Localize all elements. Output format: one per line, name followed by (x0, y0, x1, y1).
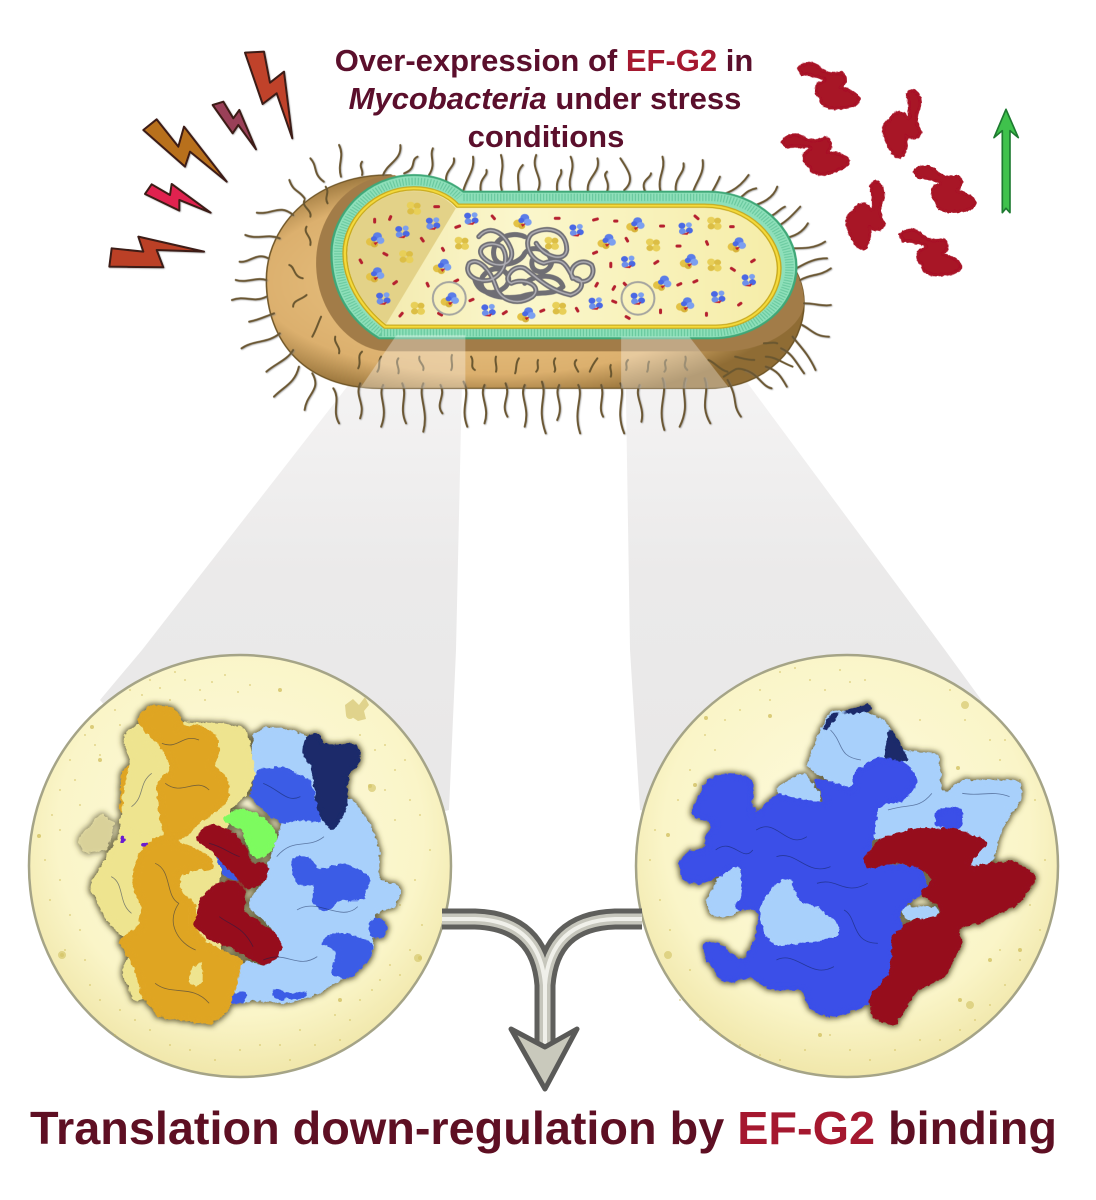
protein 4 (914, 167, 975, 212)
bacterium (232, 145, 831, 433)
highlight circle 2 (622, 282, 654, 315)
EF-G2 domains (192, 823, 283, 967)
surface contour lines (111, 738, 358, 1003)
green up arrow (994, 109, 1018, 213)
purple ligands (123, 839, 145, 845)
protein 5 (837, 180, 899, 252)
small gold lobe (120, 760, 138, 820)
beam overlay right (621, 337, 729, 388)
cut edge band (316, 175, 804, 351)
pale overlay upper (121, 728, 169, 837)
magnified disc: right (636, 655, 1058, 1077)
title: conditions (468, 119, 624, 154)
ribosomes in cytoplasm (366, 202, 756, 322)
ghost density (77, 813, 115, 853)
gold subunit (118, 705, 243, 1025)
protein 1 (798, 63, 859, 108)
EF-G2 protein cluster (781, 63, 975, 275)
inner surface hairs (289, 187, 793, 377)
title: Over-expression of EF-G2 in (335, 43, 753, 78)
arrow shaft (442, 919, 642, 1050)
shaded cut wedge (347, 191, 456, 324)
blue patches (211, 767, 388, 1005)
surface contour lines (716, 730, 1010, 970)
stress lightning bolts (109, 52, 292, 267)
protein 6 (900, 230, 961, 275)
bottom conclusion text: Translation down-regulation by EF-G2 binding (30, 1102, 1057, 1154)
light blue subunit (706, 710, 1023, 920)
arrow head (511, 1029, 577, 1089)
capsule body (266, 175, 804, 388)
plasma membrane: yellow (345, 188, 779, 327)
speckles (650, 668, 1045, 1060)
bolt: pink (145, 184, 211, 213)
navy protein (819, 703, 910, 770)
title (335, 43, 753, 154)
blue subunit (678, 757, 962, 1017)
beam overlay left (360, 335, 465, 388)
zoom beam: left (100, 335, 463, 866)
ribosome: EF-G2 bound rotated view (678, 703, 1038, 1027)
magnified disc: left (29, 655, 451, 1077)
bolt: red top (245, 52, 292, 138)
bolt: orange (143, 119, 227, 182)
merging arrow (442, 919, 642, 1089)
navy protein (302, 732, 361, 833)
outer hairs (232, 145, 831, 433)
cell wall: green (331, 175, 796, 338)
green factor (219, 808, 277, 860)
protein 2 (781, 125, 850, 181)
ribosome: EF-G2 bound side view (77, 705, 402, 1025)
EF-G2 (863, 828, 1038, 1027)
zoom beam: right (625, 335, 985, 866)
bolt: purple (213, 102, 256, 149)
chromosomal DNA (468, 229, 593, 301)
pale patches (179, 868, 221, 987)
pale splat (345, 697, 369, 721)
light blue subunit (233, 727, 402, 1003)
protein 3 (874, 88, 935, 160)
highlight circle 1 (433, 282, 466, 315)
title: Mycobacteria under stress (349, 81, 741, 116)
pale yellow subunit (89, 722, 256, 1003)
EF-G2 dots in cytoplasm (360, 207, 754, 318)
speckles (39, 672, 430, 1060)
light blue centre patch (760, 877, 841, 947)
bolt: red left (109, 237, 204, 267)
